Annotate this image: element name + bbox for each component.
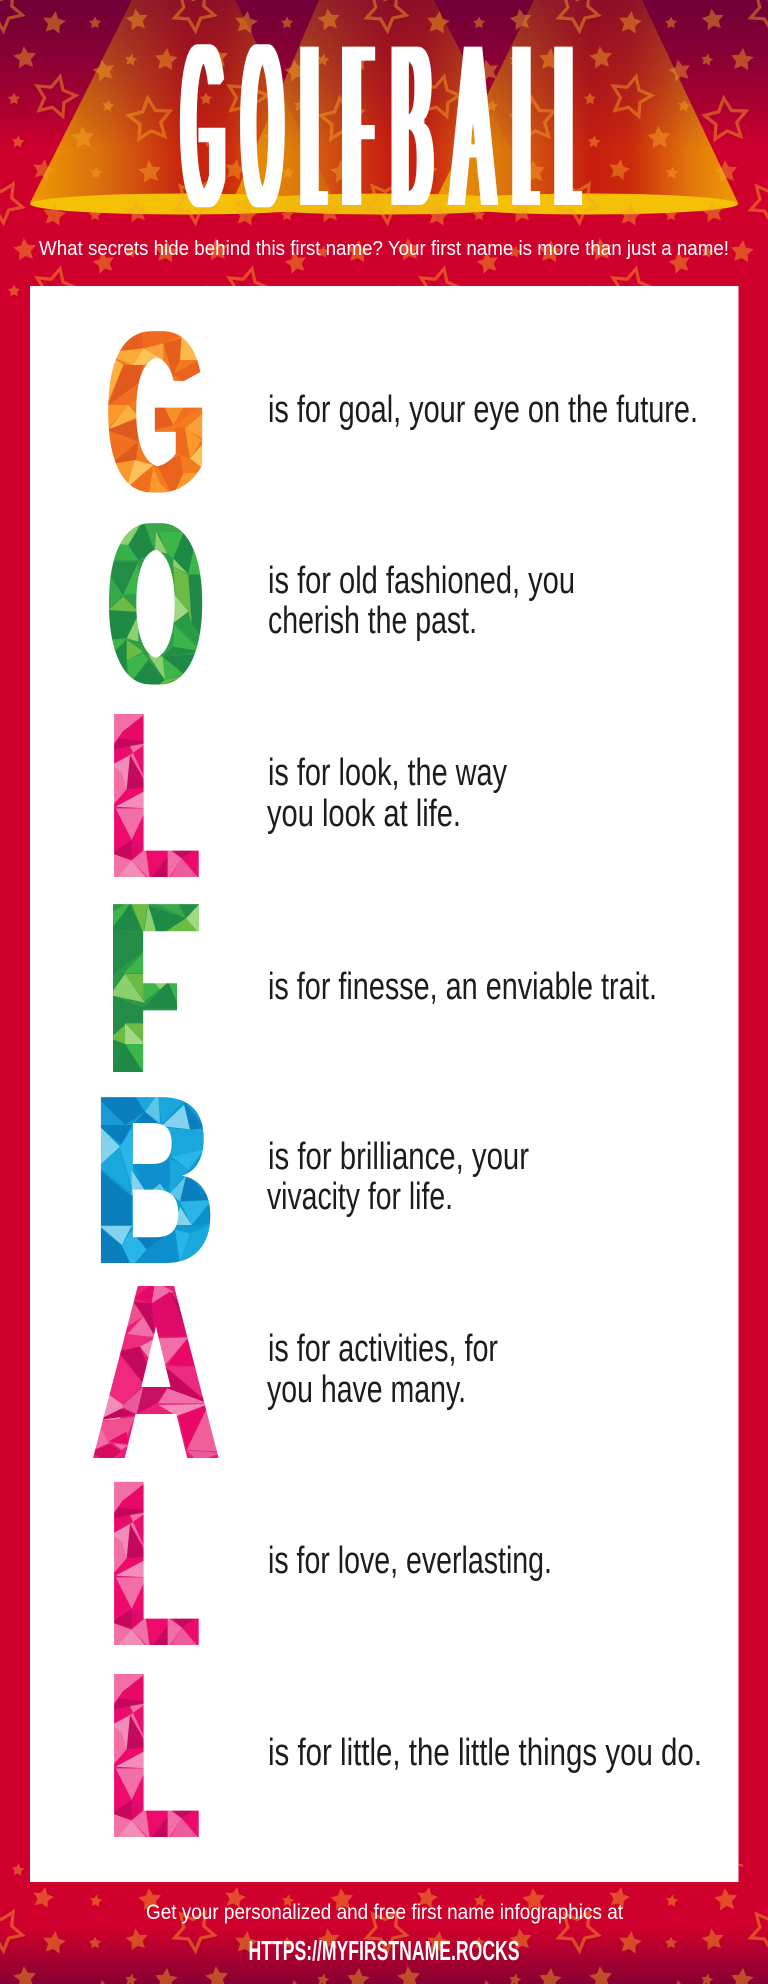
row: O [108, 523, 574, 684]
row: A [93, 1286, 498, 1458]
text L: you look at life. [267, 793, 461, 835]
letter G [108, 331, 202, 492]
title: A [453, 0, 493, 258]
title [183, 0, 575, 258]
letter B [100, 1097, 210, 1263]
title: L [560, 0, 575, 258]
title: L [306, 0, 321, 258]
text F: is for finesse, an enviable trait. [268, 966, 657, 1008]
text A: is for activities, for [268, 1328, 498, 1370]
title: B [393, 0, 431, 258]
row: F [113, 904, 654, 1072]
footer star pattern [0, 1864, 768, 1984]
row: L second [114, 1482, 550, 1645]
spotlights [0, 0, 768, 214]
text L [267, 752, 507, 835]
row: G [108, 331, 696, 492]
footer note: Get your personalized and free first name infographics at [146, 1901, 623, 1924]
text A [267, 1328, 498, 1411]
header star pattern [0, 0, 768, 296]
letter A [93, 1286, 219, 1458]
letter L third [114, 1674, 199, 1837]
text B: vivacity for life. [267, 1176, 453, 1218]
text B: is for brilliance, your [268, 1136, 529, 1178]
letter L [114, 714, 199, 877]
text L: is for look, the way [268, 752, 507, 794]
footer url: HTTPS://MYFIRSTNAME.ROCKS [248, 1935, 520, 1966]
text O [268, 560, 575, 642]
row: L third [114, 1674, 700, 1837]
text B [267, 1136, 529, 1218]
title: O [244, 0, 281, 258]
letter F [113, 904, 200, 1072]
title: F [347, 0, 369, 257]
title: L [518, 0, 533, 258]
text O: cherish the past. [268, 600, 477, 642]
text L second: is for love, everlasting. [268, 1540, 552, 1582]
row: B [100, 1097, 529, 1263]
text O: is for old fashioned, you [268, 560, 575, 602]
panel: letters [30, 286, 738, 1882]
text A: you have many. [267, 1369, 466, 1411]
title: G [183, 0, 223, 258]
row: L [114, 714, 507, 877]
subtitle: What secrets hide behind this first name? Your first name is more than just a name! [39, 238, 729, 260]
letter O [108, 523, 202, 684]
letter L second [114, 1482, 199, 1645]
